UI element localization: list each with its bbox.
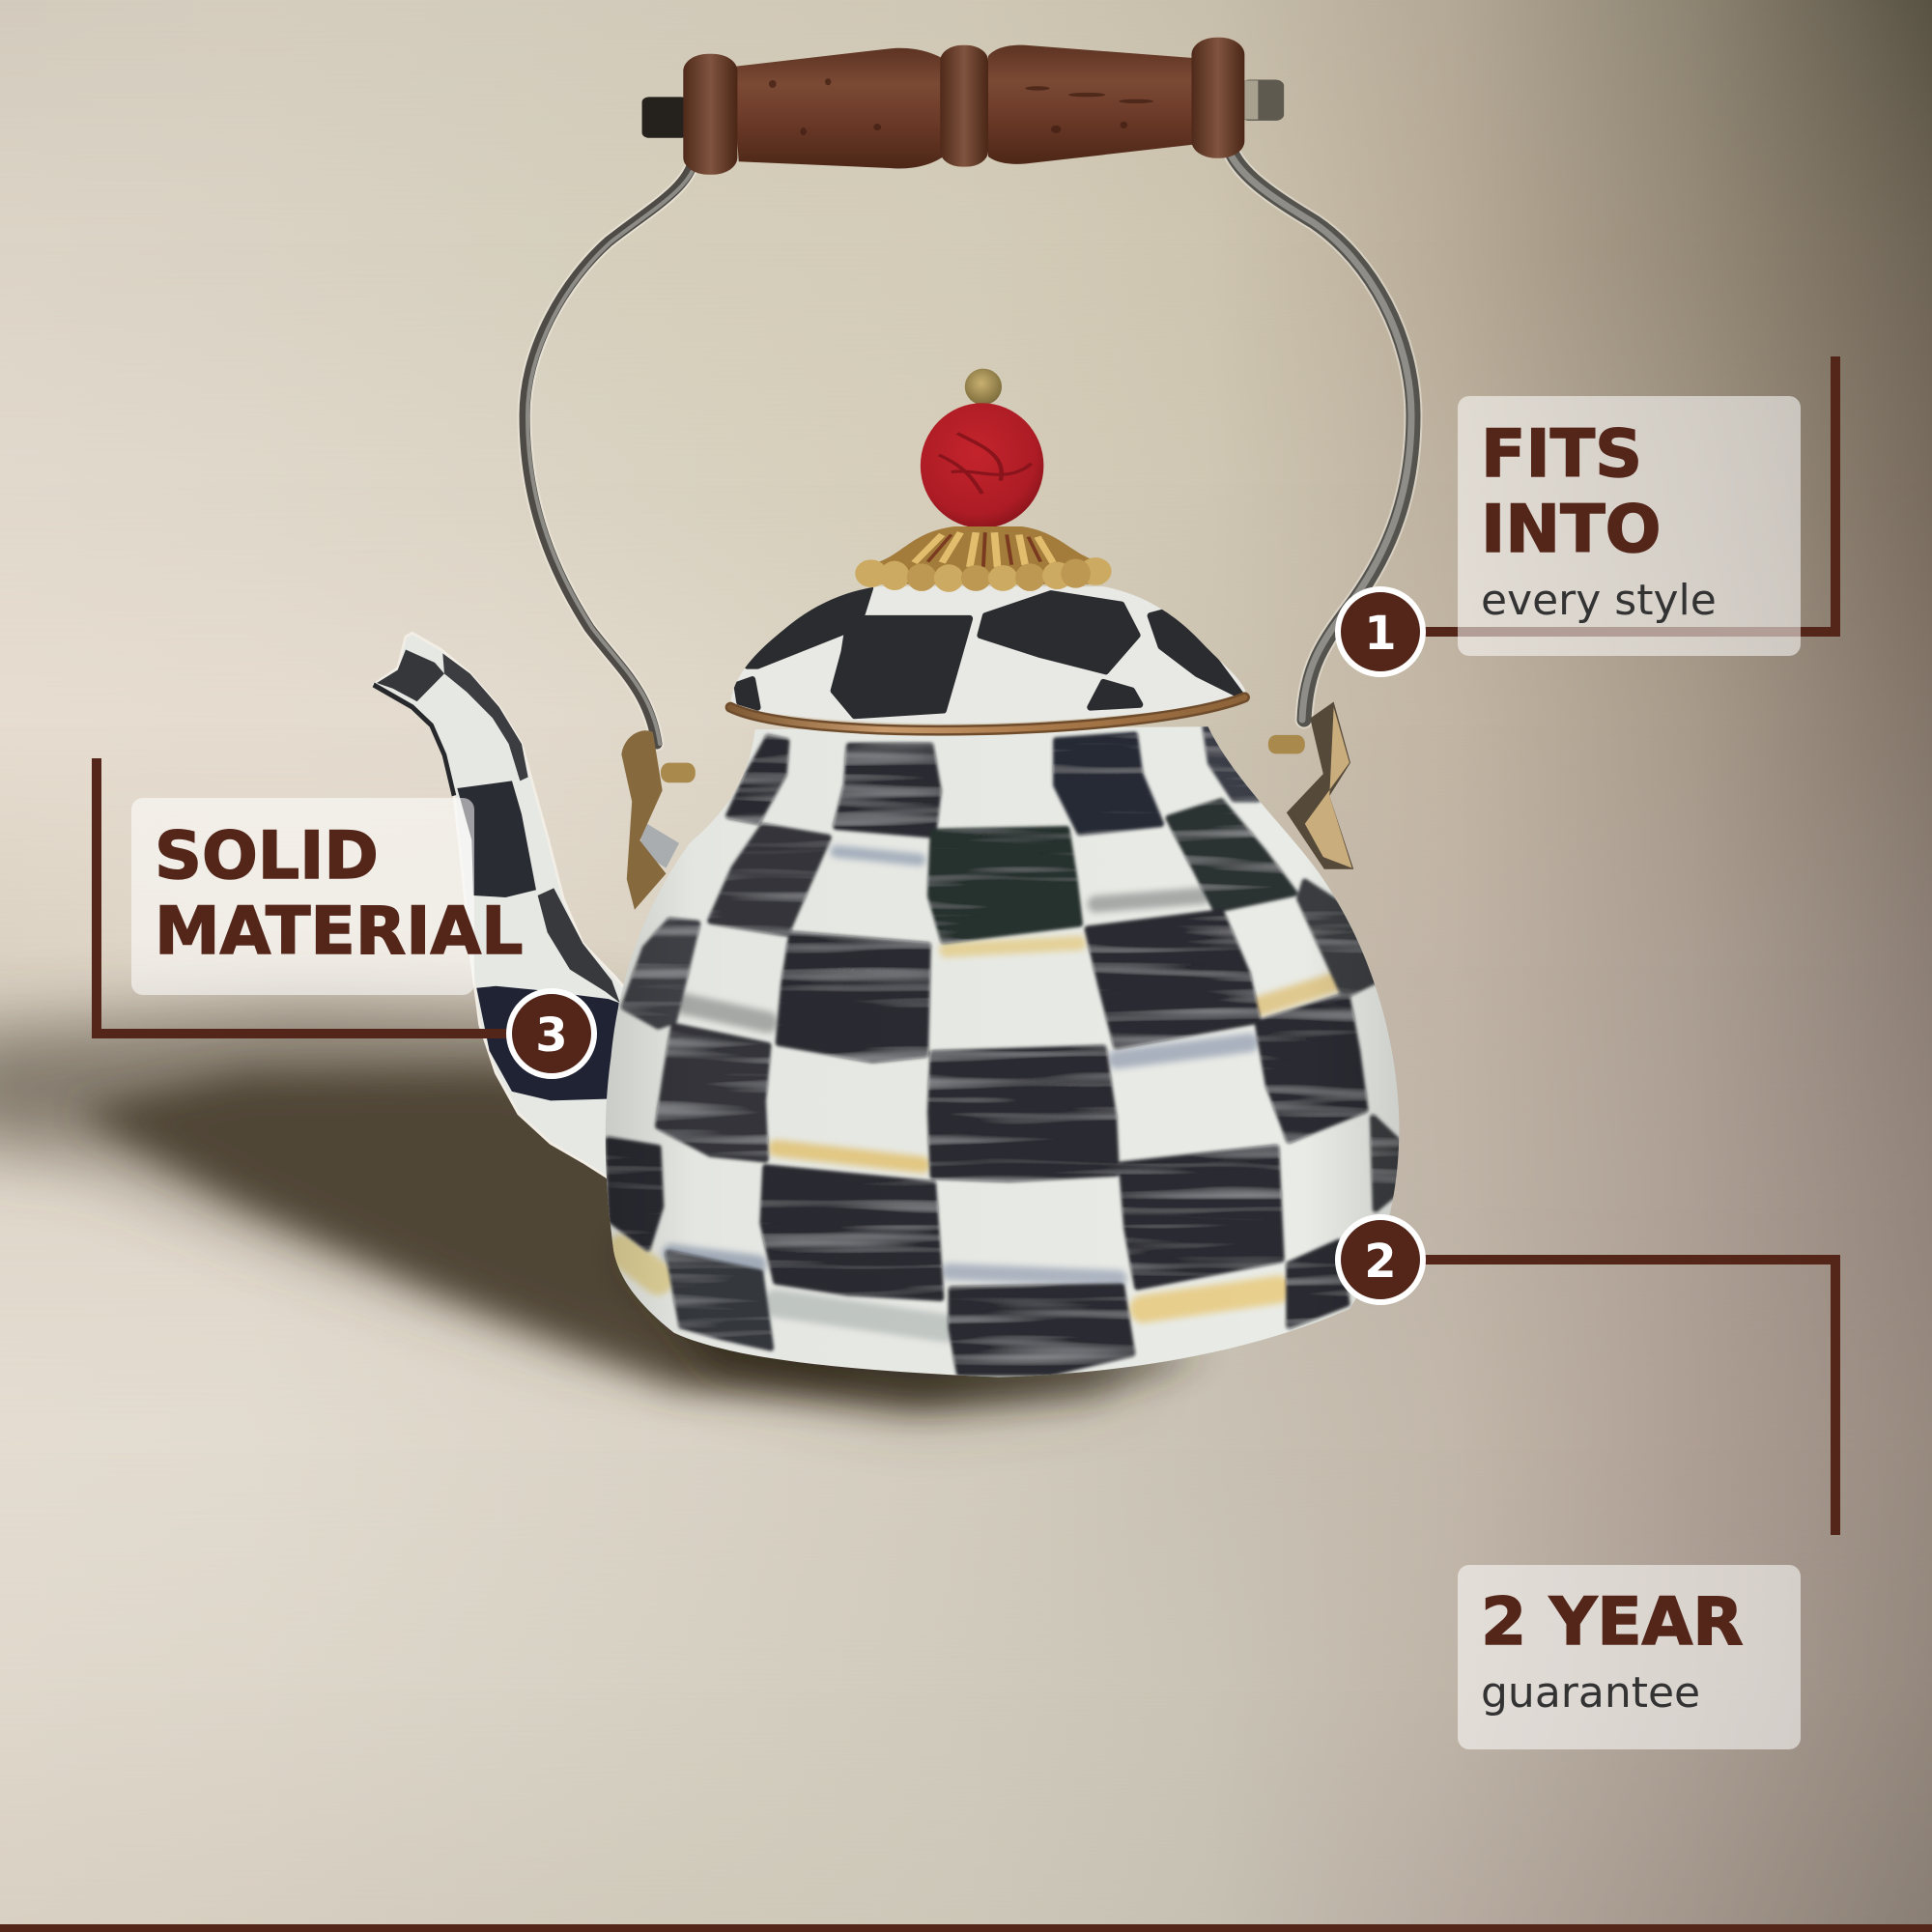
pot body with checker pattern	[605, 726, 1399, 1378]
leader line 3	[97, 758, 552, 1034]
number badge 1	[1338, 589, 1423, 674]
heading: 2 year: 2 YEAR	[1481, 1584, 1744, 1661]
brass collar ring	[730, 697, 1244, 730]
bail wire handle	[525, 145, 1413, 744]
lid with checker pattern	[730, 586, 1246, 724]
bottom rule	[0, 1924, 1932, 1932]
text panel 2	[1458, 1565, 1801, 1749]
subtext: guarantee: guarantee	[1481, 1668, 1700, 1718]
callout 2: 2 year guarantee	[1338, 1217, 1835, 1749]
number badge 2: 2	[1364, 1235, 1397, 1289]
kettle	[374, 38, 1449, 1449]
number badge 2	[1338, 1217, 1423, 1302]
number badge 1: 1	[1364, 607, 1397, 661]
wooden handle grip	[642, 38, 1284, 175]
leader line 2	[1380, 1260, 1835, 1535]
text panel 1	[1458, 396, 1801, 656]
lid knob: gold ball, red bead and ornamental base	[855, 369, 1112, 592]
number badge 3: 3	[535, 1009, 568, 1063]
spout	[374, 633, 625, 1180]
callout 1: fits into every style	[1338, 356, 1835, 674]
heading: solid material: MATERIAL	[155, 894, 523, 970]
heading: solid material: SOLID	[155, 818, 379, 895]
leader line 1	[1380, 356, 1835, 632]
callout 3: solid material	[97, 758, 594, 1076]
heading: fits into: INTO	[1481, 492, 1661, 568]
yellow and blue-grey brush tints	[621, 851, 1336, 1328]
dark checker squares	[609, 722, 1399, 1373]
subtext: every style: every style	[1481, 576, 1717, 625]
hinge brackets	[621, 701, 1353, 910]
text panel 3	[131, 798, 474, 995]
heading: fits into: FITS	[1481, 416, 1642, 493]
number badge 3	[509, 991, 594, 1076]
